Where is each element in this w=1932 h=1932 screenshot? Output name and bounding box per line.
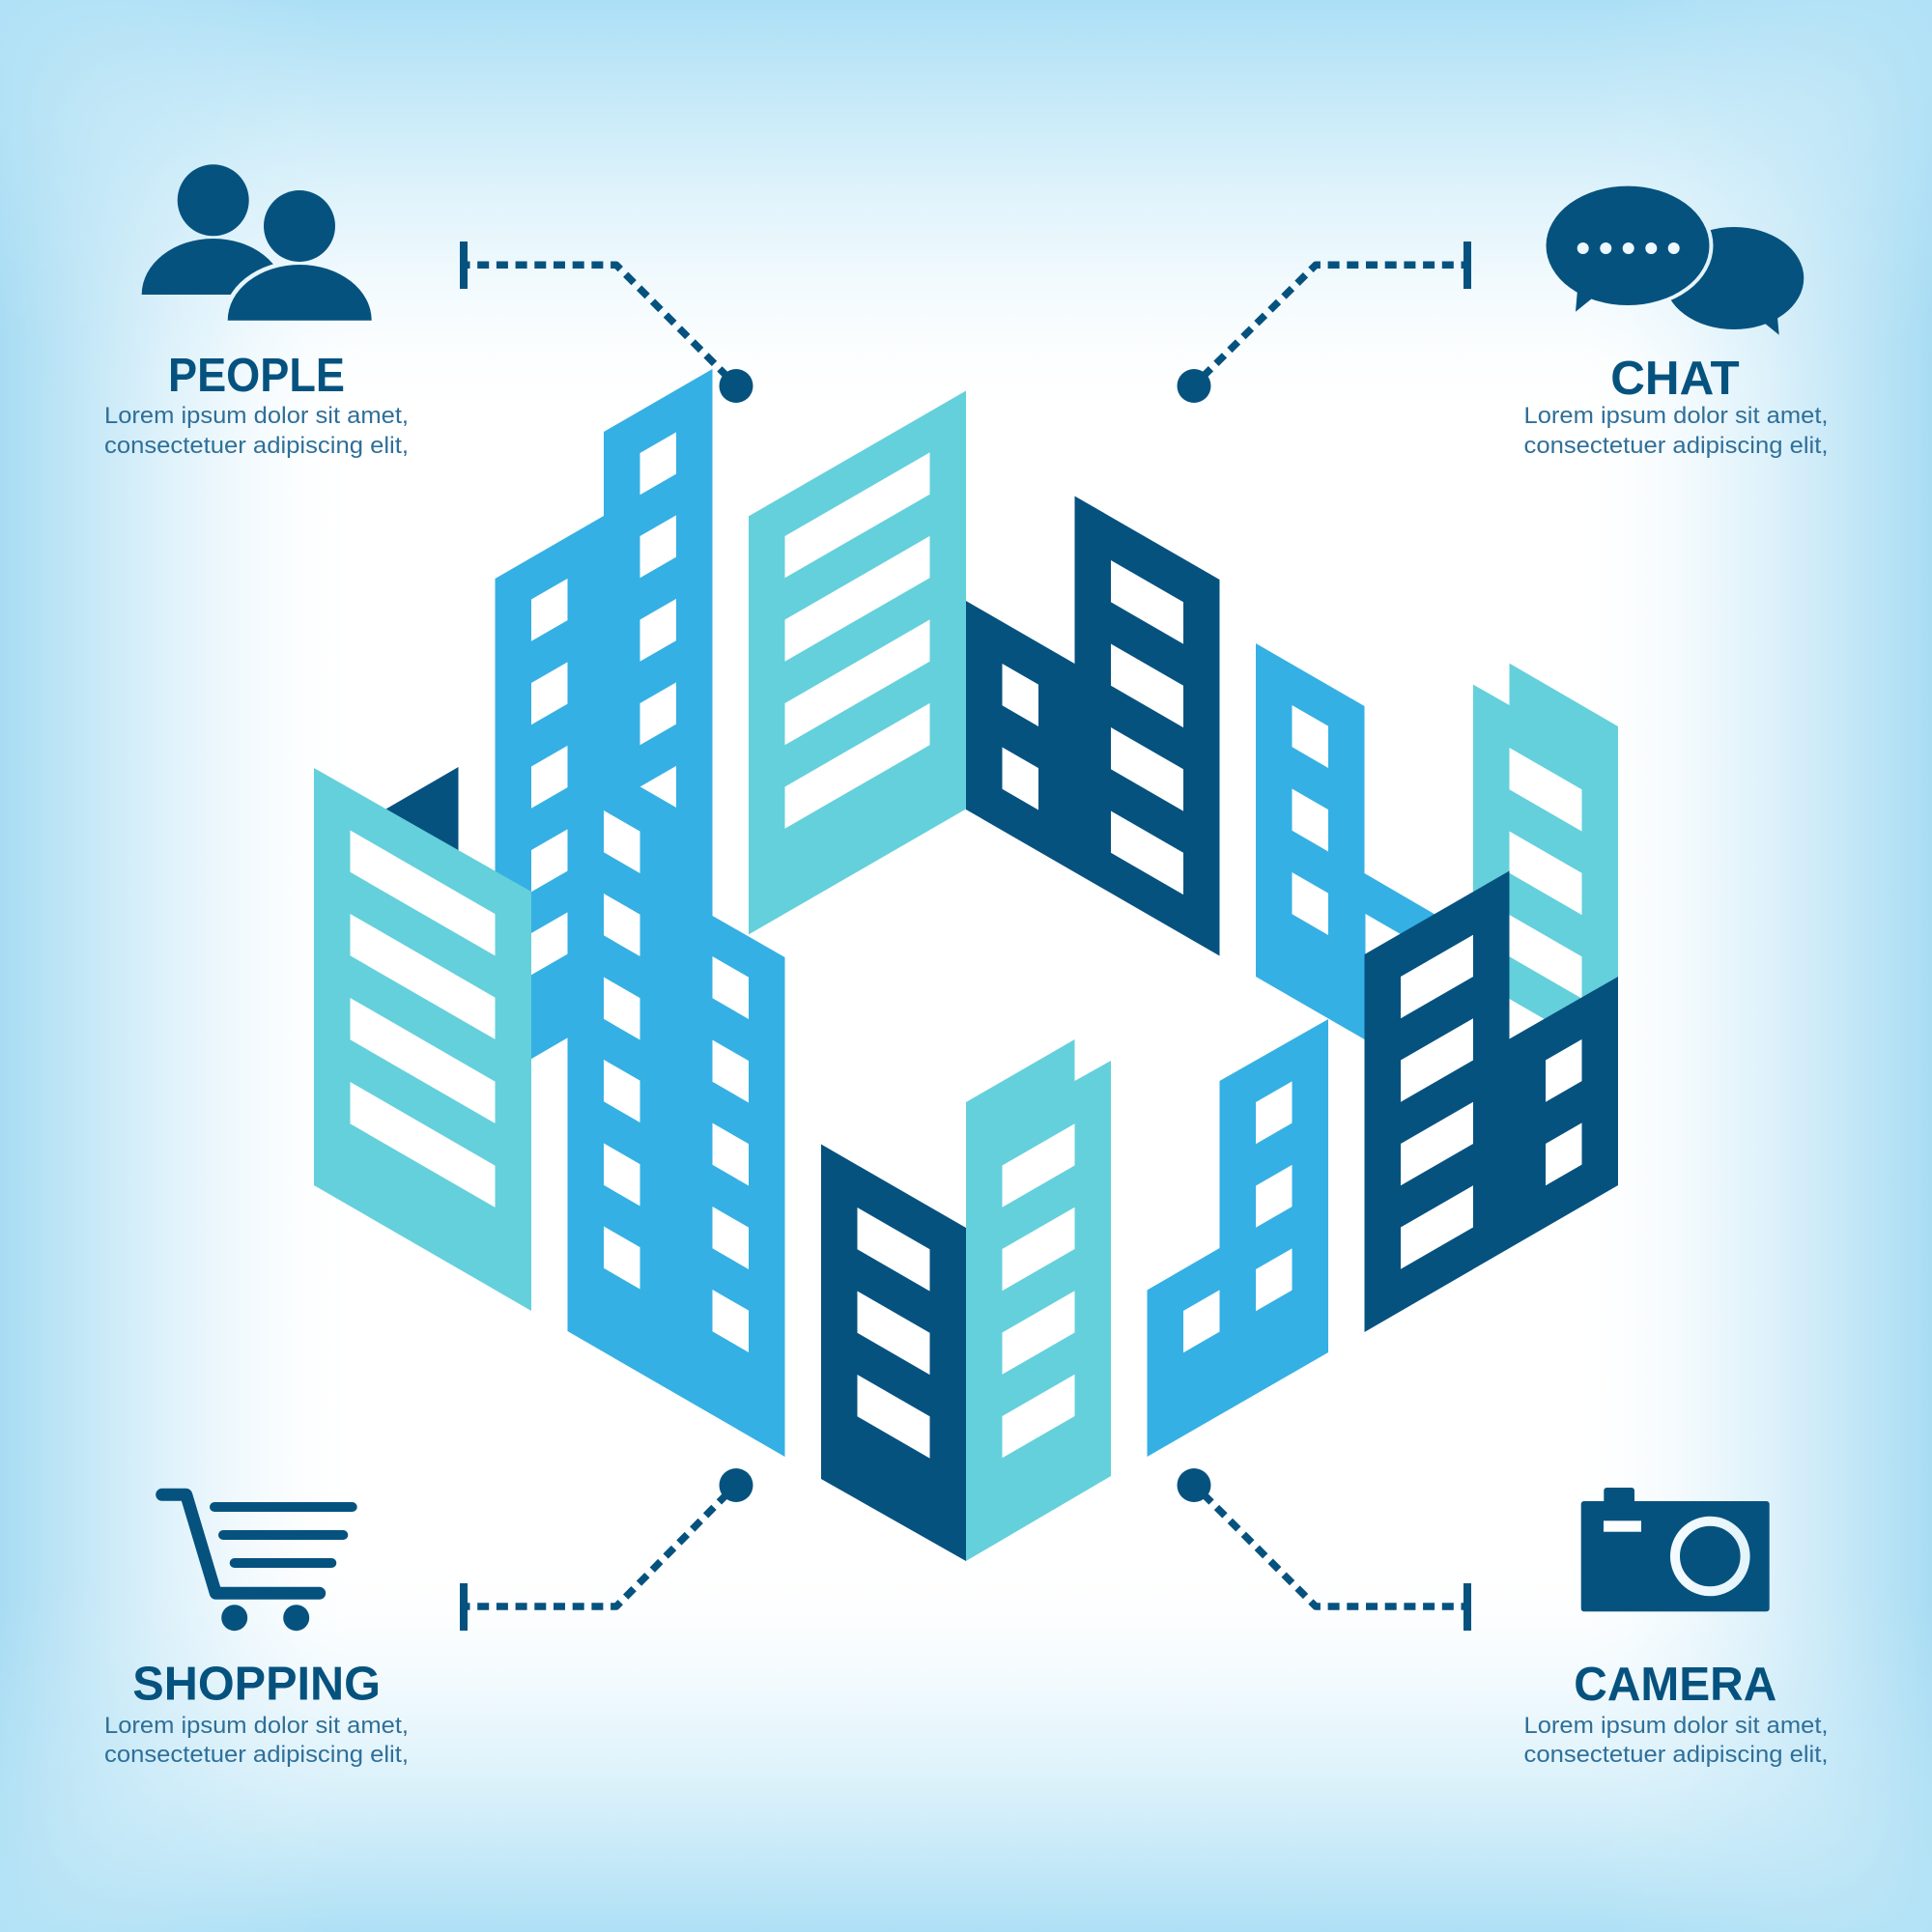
connector: shopping: [460, 1468, 753, 1631]
building: dark bottom-centre block: [821, 1144, 966, 1561]
text: chat description: Lorem ipsum dolor sit amet,: [1524, 403, 1828, 429]
building: tall blue back-left tower: [495, 369, 713, 1080]
building: blue bottom-right stepped block: [1148, 1019, 1328, 1457]
building: dark right block: [1364, 871, 1618, 1332]
building: teal left block: [314, 768, 531, 1311]
panel: shopping: [104, 1494, 409, 1768]
connector: people: [460, 242, 753, 403]
building: dark top-right block: [966, 497, 1219, 956]
text: camera description: Lorem ipsum dolor sit amet,: [1524, 1713, 1828, 1739]
building: small dark triangle roof behind left teal block: [386, 767, 458, 851]
text: camera description: [1524, 1713, 1828, 1768]
building: teal far-right tower: [1473, 664, 1618, 1053]
text: people description: [104, 403, 409, 459]
text: people description: Lorem ipsum dolor sit amet,: [104, 403, 409, 429]
icon: chat bubbles: [1546, 186, 1804, 335]
heading: people: PEOPLE: [168, 350, 345, 402]
text: shopping description: [104, 1713, 409, 1768]
heading: shopping: SHOPPING: [132, 1658, 381, 1710]
panel: people: [104, 164, 409, 459]
icon: shopping cart: [162, 1494, 353, 1631]
text: shopping description: consectetuer adipiscing elit,: [104, 1742, 409, 1768]
building: teal bottom-centre block: [966, 1039, 1111, 1561]
building: blue right tower with wing: [1256, 643, 1449, 1039]
text: camera description: consectetuer adipiscing elit,: [1524, 1742, 1828, 1768]
building: blue front-left tower: [568, 745, 784, 1457]
icon: camera: [1581, 1488, 1770, 1611]
building: teal top block: [749, 390, 966, 934]
heading: camera: CAMERA: [1574, 1659, 1776, 1711]
icon: people: [142, 164, 372, 321]
panel: chat: [1524, 186, 1828, 459]
text: chat description: [1524, 403, 1828, 459]
text: shopping description: Lorem ipsum dolor sit amet,: [104, 1713, 409, 1739]
connector: camera: [1177, 1468, 1471, 1631]
heading: chat: CHAT: [1610, 353, 1740, 405]
isometric city ring: [314, 369, 1618, 1561]
text: people description: consectetuer adipiscing elit,: [104, 433, 409, 459]
connector: chat: [1177, 242, 1471, 403]
panel: camera: [1524, 1488, 1828, 1768]
text: chat description: consectetuer adipiscing elit,: [1524, 433, 1828, 459]
